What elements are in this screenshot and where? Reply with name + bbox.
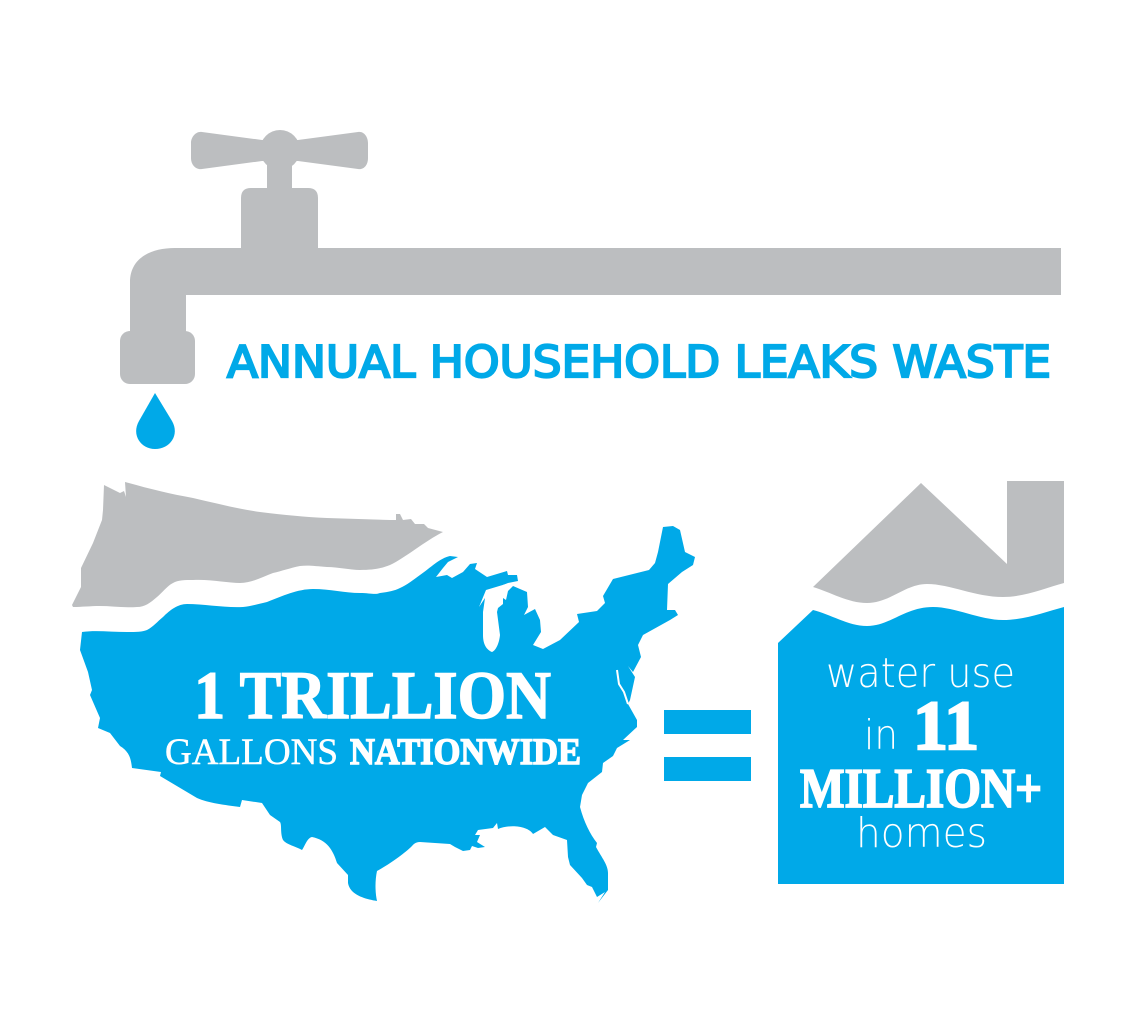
map: blue lower United States [80, 526, 695, 903]
stat: 1 trillion: 1 TRILLION [194, 657, 551, 733]
faucet valve base [241, 188, 318, 250]
icon: faucet [120, 130, 1061, 384]
icon: blue house body [778, 607, 1064, 884]
stat: million+: MILLION+ [800, 758, 1042, 820]
text: in: in [864, 711, 898, 759]
equals sign [664, 710, 751, 781]
map: gray upper United States [72, 482, 443, 607]
stat: nationwide: NATIONWIDE [350, 732, 581, 773]
text: water use: water use [826, 649, 1015, 697]
faucet handle [191, 132, 368, 169]
icon: gray house roof [813, 481, 1064, 603]
text: homes: homes [856, 809, 987, 857]
faucet stem [267, 160, 292, 192]
stat: gallons: GALLONS [165, 732, 338, 773]
Lake Michigan [479, 584, 514, 652]
faucet pipe [130, 248, 1061, 335]
stat: 11: 11 [913, 688, 979, 765]
heading: annual household leaks waste: ANNUAL HOUSEHOLD LEAKS WASTE [227, 337, 1051, 388]
icon: water drop [136, 393, 175, 449]
Chesapeake Bay [617, 670, 628, 704]
faucet nozzle [120, 331, 195, 384]
faucet handle hub [260, 130, 300, 170]
